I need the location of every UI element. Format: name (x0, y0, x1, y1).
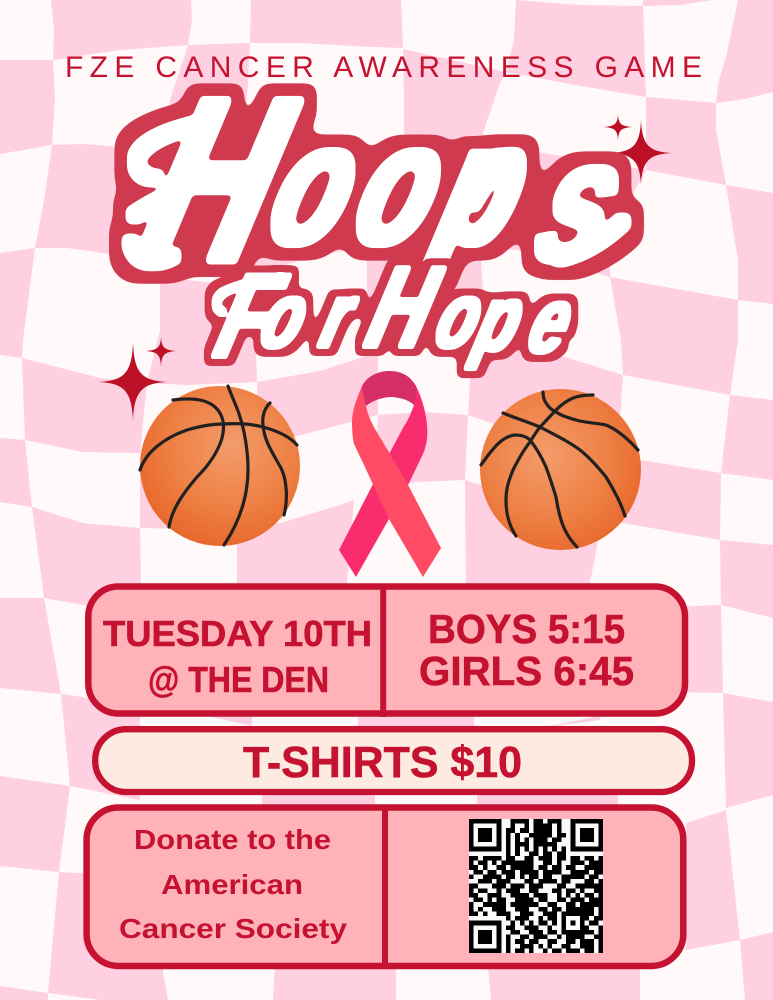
date text: TUESDAY 10TH (103, 613, 372, 654)
subtitle: For Hope: H (348, 243, 461, 372)
venue text: @ THE DEN (148, 659, 329, 700)
girls game time: GIRLS 6:45 (419, 648, 634, 694)
icon: awareness ribbon (339, 371, 441, 577)
panel: date, place and times (88, 584, 685, 717)
heading: FZE Cancer Awareness Game: FZE CANCER AWARENESS GAME (65, 51, 702, 84)
donate text line three: Cancer Society (119, 913, 347, 944)
panel: t-shirt price (95, 729, 692, 792)
subtitle: For Hope: F (196, 250, 304, 383)
subtitle: For Hope: o (245, 264, 328, 367)
QR code (469, 819, 603, 953)
icon: right basketball (480, 389, 641, 550)
panel: donate (87, 805, 683, 968)
donate text line two: American (161, 869, 303, 900)
subtitle: For Hope: o (420, 264, 503, 367)
title: Hoops: o (327, 89, 481, 280)
title: Hoops: p (411, 89, 565, 280)
subtitle: For Hope: e (513, 269, 592, 372)
boys game time: BOYS 5:15 (428, 606, 625, 652)
title: Hoops (104, 50, 680, 311)
sparkle: top right small (604, 114, 632, 141)
sparkle: left large (98, 342, 168, 422)
title: Hoops: o (241, 89, 395, 280)
title: Hoops: H (104, 50, 333, 311)
donate text: Donate to the (134, 824, 331, 855)
subtitle: For Hope (196, 243, 603, 383)
title: Hoops: s (509, 106, 657, 297)
subtitle: For Hope: p (461, 267, 543, 370)
subtitle: For Hope: r (305, 264, 392, 367)
sparkle: left small (146, 337, 176, 367)
sparkle: top right large (610, 120, 672, 186)
t-shirt text: T-SHIRTS $10 (243, 738, 522, 787)
icon: left basketball (140, 386, 300, 546)
